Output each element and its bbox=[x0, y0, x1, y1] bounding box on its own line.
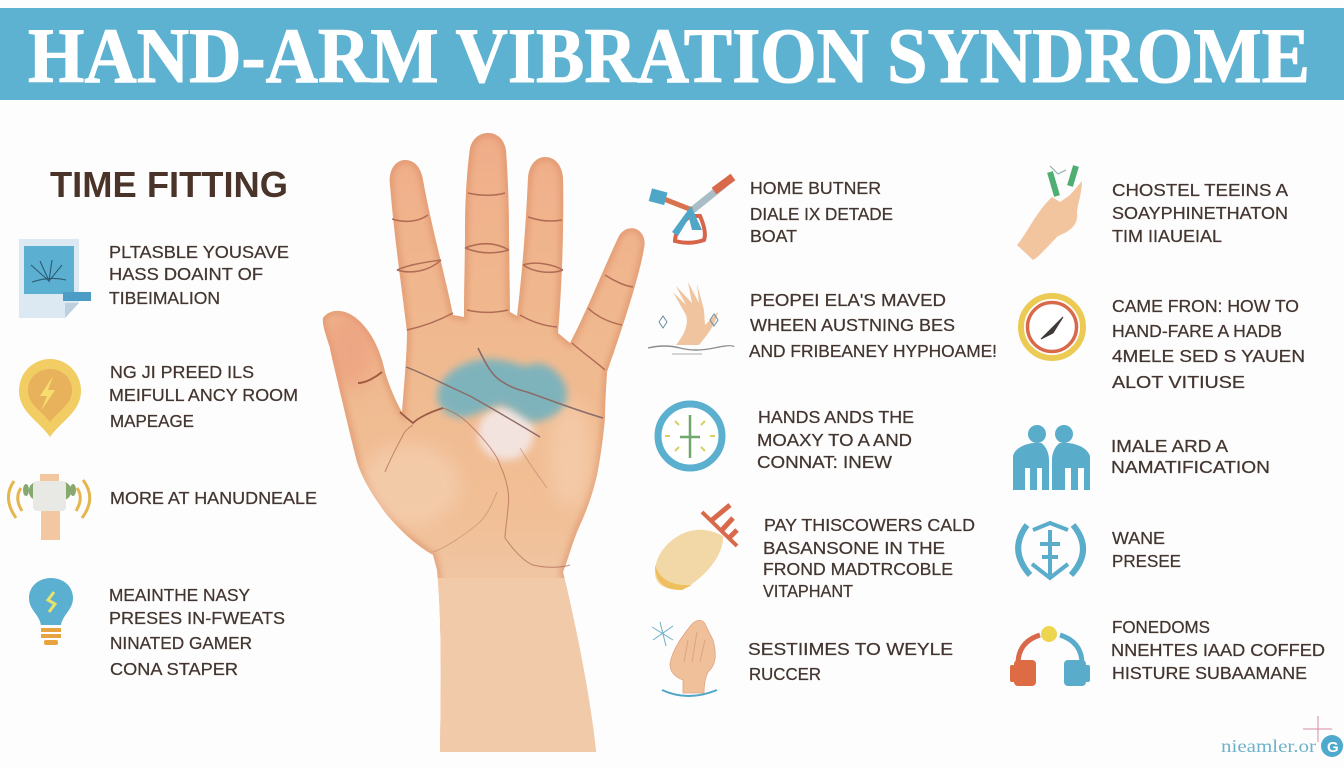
panel: right column bbox=[1010, 166, 1325, 686]
text block bbox=[1111, 617, 1325, 683]
wrist tone bbox=[438, 578, 596, 752]
text block: PAY THISCOWERS CALD bbox=[764, 515, 975, 535]
icon: lightning pin bbox=[19, 359, 81, 437]
icon: raised hand bbox=[652, 620, 717, 696]
text block: PEOPEI ELA'S MAVED bbox=[750, 290, 946, 310]
blue affected area bbox=[437, 359, 567, 422]
item: anchor shield bbox=[1018, 523, 1181, 578]
text block: CONNAT: INEW bbox=[757, 452, 893, 472]
icon: hand over waves bbox=[648, 282, 734, 354]
heading: time fitting: TIME FITTING bbox=[50, 164, 288, 205]
text block: SESTIIMES TO WEYLE bbox=[748, 639, 953, 659]
icon: clock bbox=[658, 404, 722, 468]
text block: MOAXY TO A AND bbox=[757, 430, 912, 450]
text block: PLTASBLE YOUSAVE bbox=[109, 242, 289, 262]
watermark logo: nieamler.or bbox=[1221, 736, 1316, 756]
text block: PRESEE bbox=[1112, 551, 1181, 571]
item: gauge bbox=[1021, 296, 1305, 392]
text block: RUCCER bbox=[749, 664, 821, 684]
icon: headphones bbox=[1010, 626, 1090, 686]
panel: time fitting (left column) bbox=[8, 164, 317, 679]
text block: WHEEN AUSTNING BES bbox=[750, 315, 955, 335]
text block bbox=[109, 585, 285, 679]
item: raised hand bbox=[652, 620, 953, 696]
item: light bulb bbox=[29, 578, 285, 679]
text block: PRESES IN-FWEATS bbox=[109, 608, 285, 628]
text block: HAND-FARE A HADB bbox=[1112, 321, 1282, 341]
item: clock bbox=[658, 404, 914, 472]
text block: WANE bbox=[1112, 528, 1165, 548]
text block: 4MELE SED S YAUEN bbox=[1112, 346, 1305, 366]
icon: gauge ring bbox=[1021, 296, 1083, 358]
text block: HASS DOAINT OF bbox=[109, 264, 263, 284]
text block bbox=[749, 290, 997, 361]
text block bbox=[1112, 180, 1288, 246]
icon: pointing hand bbox=[1017, 166, 1082, 260]
text block: BOAT bbox=[750, 226, 797, 246]
icon: vibrating device bbox=[8, 474, 90, 540]
edge shading bbox=[323, 133, 645, 752]
watermark logo: G bbox=[1327, 739, 1339, 756]
text block: TIBEIMALION bbox=[109, 288, 220, 308]
text block: MEAINTHE NASY bbox=[109, 585, 250, 605]
item: warning pin bbox=[19, 359, 298, 437]
item: pointing hand bbox=[1017, 166, 1288, 260]
text block bbox=[750, 178, 893, 246]
text block: CAME FRON: HOW TO bbox=[1112, 296, 1299, 316]
text block: NG JI PREED ILS bbox=[110, 362, 254, 382]
text block bbox=[109, 242, 289, 308]
icon: tool bbox=[649, 177, 733, 243]
text block: MAPEAGE bbox=[110, 411, 194, 431]
icon: light bulb bbox=[29, 578, 73, 645]
white numb area bbox=[478, 406, 534, 460]
text block: TIM IIAUEIAL bbox=[1112, 226, 1222, 246]
text block bbox=[757, 407, 914, 472]
icon: two people bbox=[1013, 425, 1090, 490]
text block: CHOSTEL TEEINS A bbox=[1112, 180, 1288, 200]
text block: DIALE IX DETADE bbox=[750, 204, 893, 224]
item: two people bbox=[1013, 425, 1270, 490]
text block: CONA STAPER bbox=[110, 659, 238, 679]
title banner bbox=[0, 8, 1344, 100]
text block: SOAYPHINETHATON bbox=[1112, 203, 1288, 223]
text block: HANDS ANDS THE bbox=[758, 407, 914, 427]
panel: middle column bbox=[648, 177, 997, 696]
text block: HOME BUTNER bbox=[750, 178, 881, 198]
watermark logo bbox=[1221, 716, 1343, 757]
text block bbox=[748, 639, 953, 684]
text block: FONEDOMS bbox=[1112, 617, 1210, 637]
text block: IMALE ARD A bbox=[1111, 436, 1228, 456]
item: hand over water bbox=[648, 282, 997, 361]
item: vibration bbox=[8, 474, 317, 540]
text block: ALOT VITIUSE bbox=[1112, 372, 1245, 392]
text block: NNEHTES IAAD COFFED bbox=[1111, 640, 1325, 660]
text block bbox=[1112, 296, 1305, 392]
text block bbox=[109, 362, 298, 431]
text block: MEIFULL ANCY ROOM bbox=[109, 385, 298, 405]
text block: MORE AT HANUDNEALE bbox=[110, 488, 317, 508]
icon: anchor shield bbox=[1018, 523, 1083, 578]
text block: NINATED GAMER bbox=[110, 633, 252, 653]
icon: document bbox=[19, 239, 91, 318]
text block bbox=[1112, 528, 1181, 571]
text block: VITAPHANT bbox=[763, 581, 853, 601]
icon: sponge and rake bbox=[655, 505, 737, 590]
text block: NAMATIFICATION bbox=[1111, 457, 1270, 477]
item: headphones bbox=[1010, 617, 1325, 686]
text block: AND FRIBEANEY HYPHOAME! bbox=[749, 341, 997, 361]
item: document bbox=[19, 239, 289, 318]
item: sponge and rake bbox=[655, 505, 975, 601]
text block: BASANSONE IN THE bbox=[763, 538, 945, 558]
text block: FROND MADTRCOBLE bbox=[763, 559, 953, 579]
text block bbox=[763, 515, 975, 601]
item: tool bbox=[649, 177, 893, 246]
text block: HISTURE SUBAAMANE bbox=[1112, 663, 1307, 683]
central hand illustration bbox=[322, 133, 645, 752]
palm creases bbox=[358, 193, 633, 567]
text block bbox=[1111, 436, 1270, 477]
